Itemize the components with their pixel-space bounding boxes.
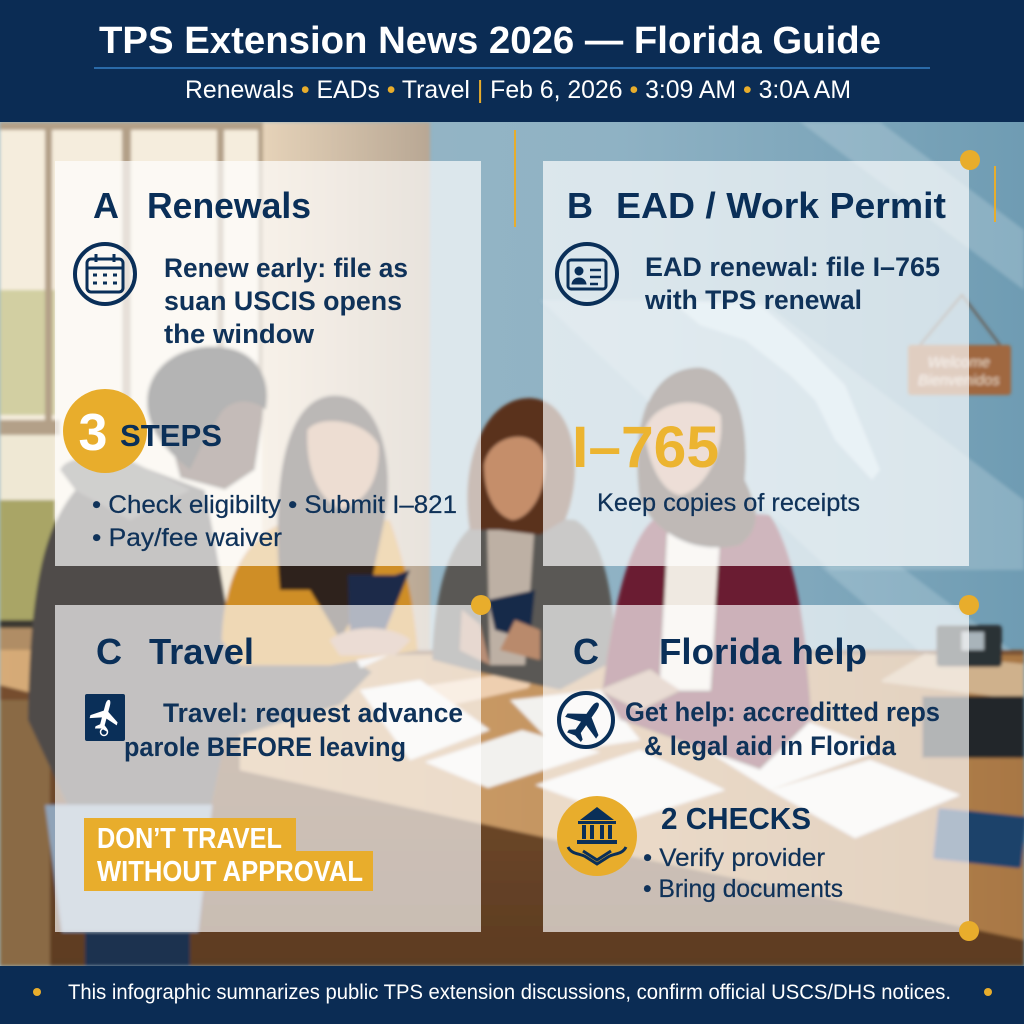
- steps list: [92, 491, 457, 552]
- steps list: • Check eligibilty • Submit I–821: [92, 491, 457, 519]
- panel: renewals: [55, 161, 481, 566]
- renewals text: Renew early: file as: [164, 253, 408, 283]
- heading: A Renewals: A: [93, 185, 119, 226]
- person: woman right: [602, 510, 812, 770]
- footer text: This infographic sumnarizes public TPS extension discussions, confirm official USCS/DHS notices.: [68, 981, 951, 1004]
- beige wall and curtain: [262, 122, 430, 682]
- warning banner: [84, 818, 373, 891]
- wooden sign: Bienvenidos: [918, 372, 1000, 389]
- figure: I-765: I–765: [572, 415, 719, 480]
- heading: A Renewals: Renewals: [147, 185, 311, 226]
- checks list: [643, 844, 843, 903]
- icon: ID card: [557, 244, 617, 304]
- heading: B EAD / Work Permit: B: [567, 185, 593, 226]
- help text: & legal aid in Florida: [644, 731, 897, 761]
- checks list: • Bring documents: [643, 875, 843, 903]
- header band: [0, 0, 1024, 122]
- checks list: • Verify provider: [643, 844, 825, 872]
- EAD text: [644, 252, 940, 315]
- papers: [400, 668, 540, 712]
- icon: bank in hands: [557, 796, 637, 876]
- footer band: [0, 966, 1024, 1024]
- renewals text: suan USCIS opens: [164, 286, 402, 316]
- panel: travel: [55, 605, 481, 932]
- decorative dots: [471, 130, 996, 941]
- badge: 3 steps: [63, 389, 222, 473]
- side table and drawer: [882, 654, 1024, 700]
- icon: plane circle: [558, 692, 614, 748]
- renewals text: [164, 253, 408, 349]
- badge: 3 steps: 3: [79, 404, 107, 462]
- renewals text: the window: [164, 319, 315, 349]
- phone: [936, 625, 1002, 667]
- heading: C Travel: Travel: [149, 631, 254, 672]
- panel: Florida help: [543, 605, 969, 932]
- warning banner: WITHOUT APPROVAL: [97, 856, 363, 888]
- panel: EAD: [543, 161, 969, 566]
- icon: passport with plane: [85, 694, 125, 741]
- person: woman yellow: [222, 515, 418, 665]
- heading: C Florida help: C: [573, 631, 599, 672]
- help text: Get help: accreditted reps: [625, 697, 940, 727]
- person: man: [28, 462, 372, 810]
- Florida map: [670, 300, 880, 480]
- EAD text: with TPS renewal: [644, 285, 862, 315]
- desk: [0, 650, 1024, 966]
- travel text: [124, 698, 463, 762]
- heading: C Florida help: Florida help: [659, 631, 867, 672]
- heading: B EAD / Work Permit: EAD / Work Permit: [616, 185, 946, 226]
- travel text: Travel: request advance: [163, 698, 463, 728]
- person: woman centre: [432, 515, 616, 690]
- steps list: • Pay/fee waiver: [92, 524, 282, 552]
- checks heading: 2 CHECKS: [661, 801, 811, 836]
- help text: [625, 697, 940, 761]
- heading: C Travel: C: [96, 631, 122, 672]
- badge: 3 steps: STEPS: [120, 418, 222, 453]
- travel text: parole BEFORE leaving: [124, 732, 406, 762]
- icon: calendar: [75, 244, 135, 304]
- EAD text: EAD renewal: file I–765: [645, 252, 940, 282]
- wooden sign: [908, 295, 1011, 395]
- warning banner: DON’T TRAVEL: [97, 823, 282, 855]
- note: receipts: Keep copies of receipts: [597, 489, 860, 517]
- subtitle: Renewals • EADs • Travel | Feb 6, 2026 • 3:09 AM • 3:0A AM: [185, 76, 851, 104]
- sunbeams on wall: [540, 122, 1024, 570]
- wooden sign: Welcome: [928, 354, 990, 371]
- title: TPS Extension News 2026 — Florida Guide: [99, 20, 881, 62]
